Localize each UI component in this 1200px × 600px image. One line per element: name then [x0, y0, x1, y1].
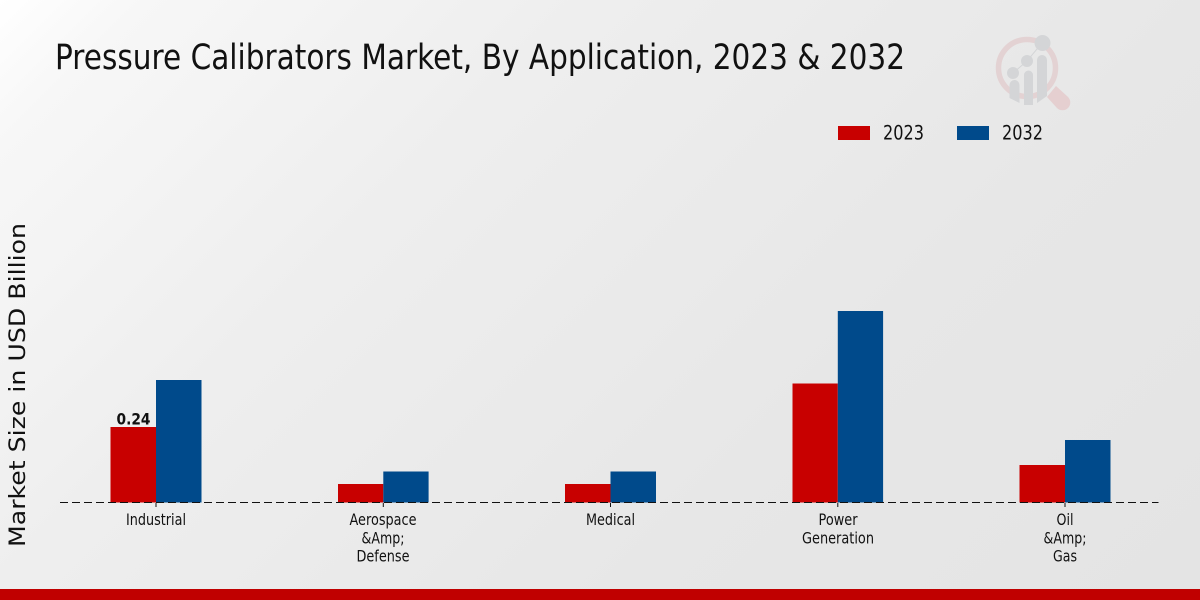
category label: Oil & Gas: Gas	[1053, 546, 1077, 566]
legend label: 2023: 2023	[883, 122, 924, 144]
bars: Power Generation	[792, 311, 883, 502]
category label: Power Generation: Generation	[802, 528, 874, 548]
category label: Medical: Medical	[586, 510, 635, 529]
category label: Aerospace & Defense: Defense	[356, 546, 410, 566]
legend swatch: 2023	[838, 126, 870, 140]
icon: watermark logo	[998, 35, 1070, 110]
bar chart	[60, 311, 1158, 507]
bars: Aerospace & Defense	[338, 472, 429, 502]
bars: Medical	[565, 472, 656, 502]
category label: Aerospace & Defense: Aerospace	[350, 510, 416, 529]
bars: Industrial	[110, 380, 202, 502]
footer bar	[0, 589, 1200, 600]
legend label: 2032: 2032	[1002, 122, 1043, 144]
legend	[838, 122, 1043, 144]
category label: Aerospace & Defense: &Amp;	[362, 528, 404, 548]
category label: Power Generation	[802, 510, 874, 548]
legend swatch: 2032	[957, 126, 989, 140]
category label: Oil & Gas: &Amp;	[1044, 528, 1086, 548]
y axis label: Market Size in USD Billion	[5, 223, 31, 547]
category label: Power Generation: Power	[818, 510, 858, 529]
category label: Oil & Gas	[1044, 510, 1086, 566]
category label: Industrial: Industrial	[126, 510, 186, 529]
category label: Aerospace & Defense	[350, 510, 416, 566]
category label: Oil & Gas: Oil	[1056, 510, 1074, 529]
x axis baseline	[60, 502, 1158, 504]
bars: Oil & Gas	[1020, 440, 1110, 502]
title: Pressure Calibrators Market, By Application, 2023 & 2032	[55, 38, 905, 78]
value label: 0.24: 0.24	[116, 410, 150, 428]
